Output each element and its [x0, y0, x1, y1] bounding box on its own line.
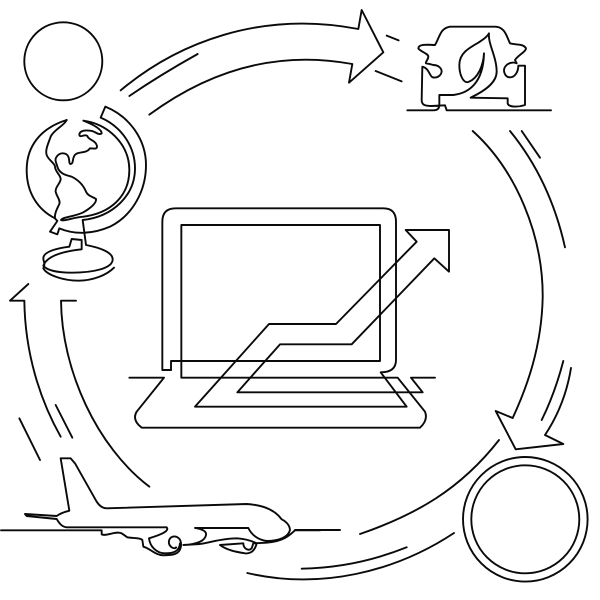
icon: eco car with leaf: [407, 27, 551, 110]
accent stroke upper short: [522, 131, 540, 158]
arrow: right curved arrow to circle: [473, 131, 571, 449]
icon: ring circle: [463, 457, 588, 582]
accent stroke lower: [542, 361, 563, 420]
laptop lid and rising arrow: [162, 208, 449, 407]
icon: globe: [27, 107, 146, 281]
arrow: bottom arc strokes: [247, 440, 499, 579]
airplane fuselage, wing and engines: [1, 458, 320, 555]
globe ball and stand: [27, 107, 146, 281]
bottom accent stroke: [302, 547, 407, 569]
arrow: top curved arrow to car: [121, 10, 402, 115]
globe continents: [46, 120, 129, 220]
laptop screen and base: [129, 225, 426, 428]
horizon line right of airplane: [295, 529, 340, 531]
icon: laptop with growth arrow: [129, 208, 449, 428]
car body and ground line: [407, 27, 551, 110]
accent stroke right: [56, 405, 72, 438]
icon: airplane: [1, 458, 320, 555]
dash lower: [376, 71, 402, 81]
arrow: left curved arrow to globe: [10, 284, 149, 487]
dash upper: [387, 36, 399, 40]
arrow accent stroke: [129, 54, 198, 96]
icon: sun circle: [24, 22, 102, 100]
accent stroke upper long: [510, 131, 565, 247]
bottom outer arc: [247, 533, 454, 579]
accent stroke left: [19, 418, 40, 460]
inner edge of arrow: [61, 301, 149, 487]
